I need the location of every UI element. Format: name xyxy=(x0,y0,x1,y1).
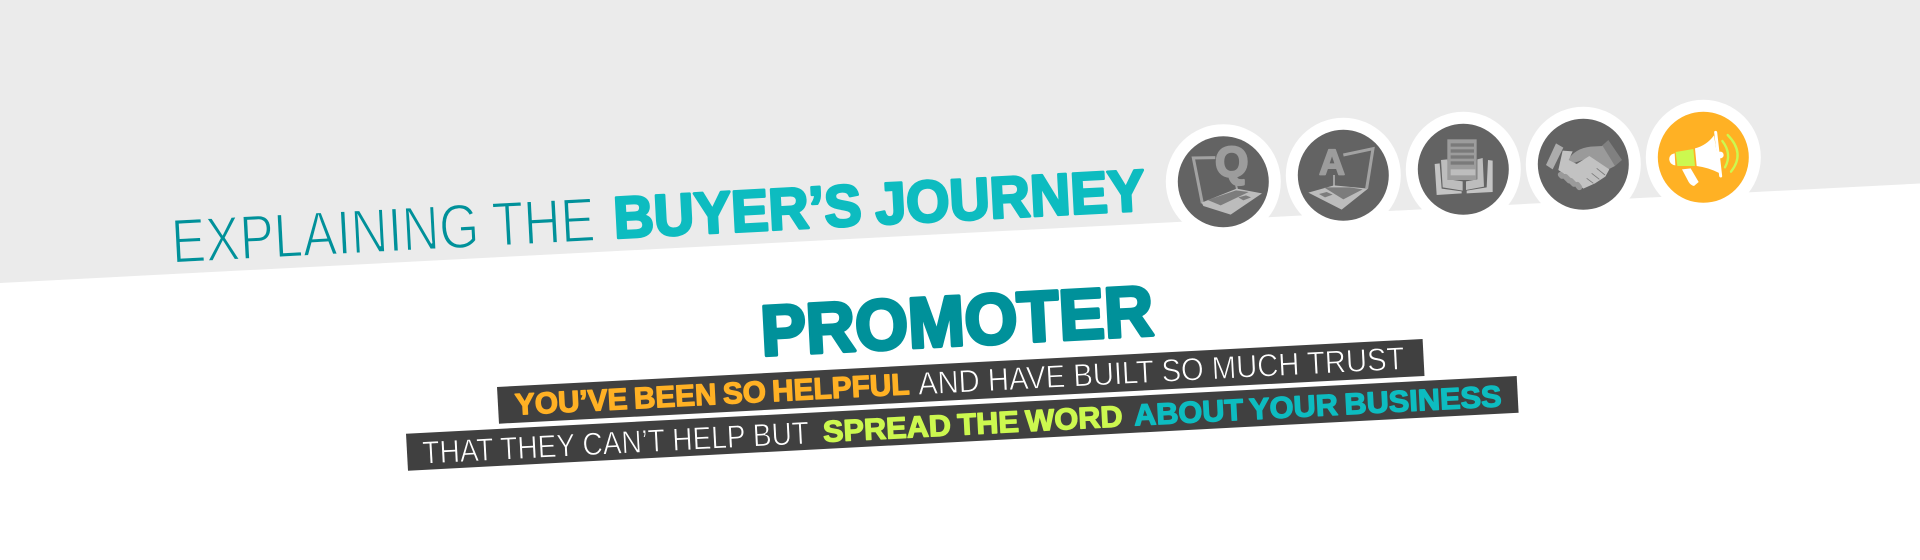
background band xyxy=(0,0,1920,283)
icon row xyxy=(1166,100,1761,239)
text: spread the word: SPREAD THE WORD xyxy=(822,400,1123,449)
title: light part: EXPLAINING THE xyxy=(170,185,597,277)
icon: handshake xyxy=(1526,107,1641,222)
text: that they can't help but: THAT THEY CAN’T HELP BUT xyxy=(421,415,810,471)
banner line 2 xyxy=(406,376,1519,471)
title xyxy=(170,158,1146,277)
banner bar 1 xyxy=(497,339,1424,424)
icon: megaphone, active step xyxy=(1646,100,1761,215)
title: bold part: BUYER’S JOURNEY xyxy=(612,158,1146,251)
icon: question laptop: Q xyxy=(1215,138,1248,186)
icon: answer laptop xyxy=(1286,118,1401,233)
text: and have built so much trust: AND HAVE BUILT SO MUCH TRUST xyxy=(917,340,1405,402)
banner bar 2 xyxy=(406,376,1519,471)
icon: question laptop xyxy=(1166,124,1281,239)
icon: book and document xyxy=(1406,112,1521,227)
banner line 1 xyxy=(497,339,1424,424)
text: you've been so helpful: YOU’VE BEEN SO HELPFUL xyxy=(514,368,910,422)
heading: promoter: PROMOTER xyxy=(759,272,1155,371)
icon: answer laptop: A xyxy=(1319,142,1345,182)
text: about your business: ABOUT YOUR BUSINESS xyxy=(1133,380,1502,432)
